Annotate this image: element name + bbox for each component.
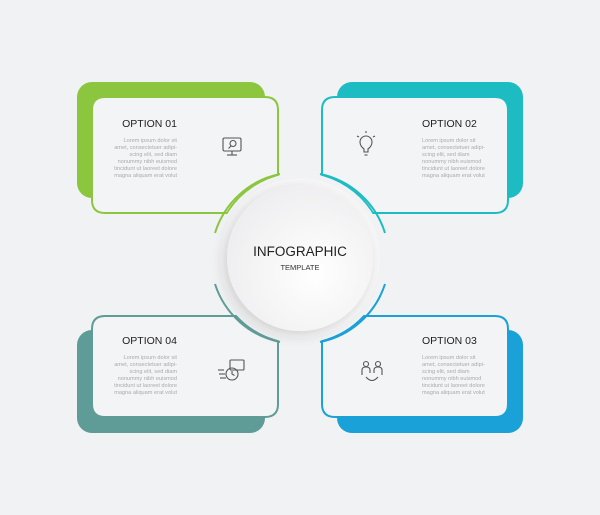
icon: fast clock — [218, 360, 244, 380]
text block: option 01: magna aliquam erat volut — [114, 173, 177, 179]
text block: option 03: scing elit, sed diam — [422, 369, 470, 375]
text block: option 01: tincidunt ut laoreet dolore — [114, 166, 177, 172]
text block: option 01: scing elit, sed diam — [129, 152, 177, 158]
heading: option 01: OPTION 01 — [122, 118, 177, 130]
panel: option 02 — [322, 82, 523, 213]
text block: option 04: nonummy nibh euismod — [118, 376, 177, 382]
panel: option 01 — [77, 82, 278, 213]
center circle — [220, 178, 380, 338]
text block: option 04: magna aliquam erat volut — [114, 390, 177, 396]
text block: option 03: Lorem ipsum dolor sit — [422, 355, 476, 361]
text block: option 01: amet, consectetuer adipi- — [114, 145, 177, 151]
heading: option 04: OPTION 04 — [122, 335, 177, 347]
icon: team — [362, 362, 382, 380]
panel: option 04 — [77, 316, 278, 433]
text block: option 02: nonummy nibh euismod — [422, 159, 481, 165]
text block: option 02: scing elit, sed diam — [422, 152, 470, 158]
text block: option 03: tincidunt ut laoreet dolore — [422, 383, 485, 389]
heading: option 02: OPTION 02 — [422, 118, 477, 130]
panel: option 03 — [322, 316, 523, 433]
text block: option 03: magna aliquam erat volut — [422, 390, 485, 396]
title: INFOGRAPHIC — [253, 244, 347, 259]
text block: option 04: tincidunt ut laoreet dolore — [114, 383, 177, 389]
text block: option 02: magna aliquam erat volut — [422, 173, 485, 179]
text block: option 04: amet, consectetuer adipi- — [114, 362, 177, 368]
heading: option 03: OPTION 03 — [422, 335, 477, 347]
subtitle: TEMPLATE — [280, 263, 320, 272]
text block: option 01: nonummy nibh euismod — [118, 159, 177, 165]
icon: monitor search — [223, 138, 241, 155]
text block: option 02: tincidunt ut laoreet dolore — [422, 166, 485, 172]
text block: option 03: nonummy nibh euismod — [422, 376, 481, 382]
text block: option 02: amet, consectetuer adipi- — [422, 145, 485, 151]
text block: option 04: Lorem ipsum dolor sit — [124, 355, 177, 361]
icon: light bulb — [357, 131, 375, 155]
text block: option 01: Lorem ipsum dolor sit — [124, 138, 177, 144]
text block: option 04: scing elit, sed diam — [129, 369, 177, 375]
ring arcs — [215, 174, 385, 342]
text block: option 03: amet, consectetuer adipi- — [422, 362, 485, 368]
text block: option 02: Lorem ipsum dolor sit — [422, 138, 476, 144]
